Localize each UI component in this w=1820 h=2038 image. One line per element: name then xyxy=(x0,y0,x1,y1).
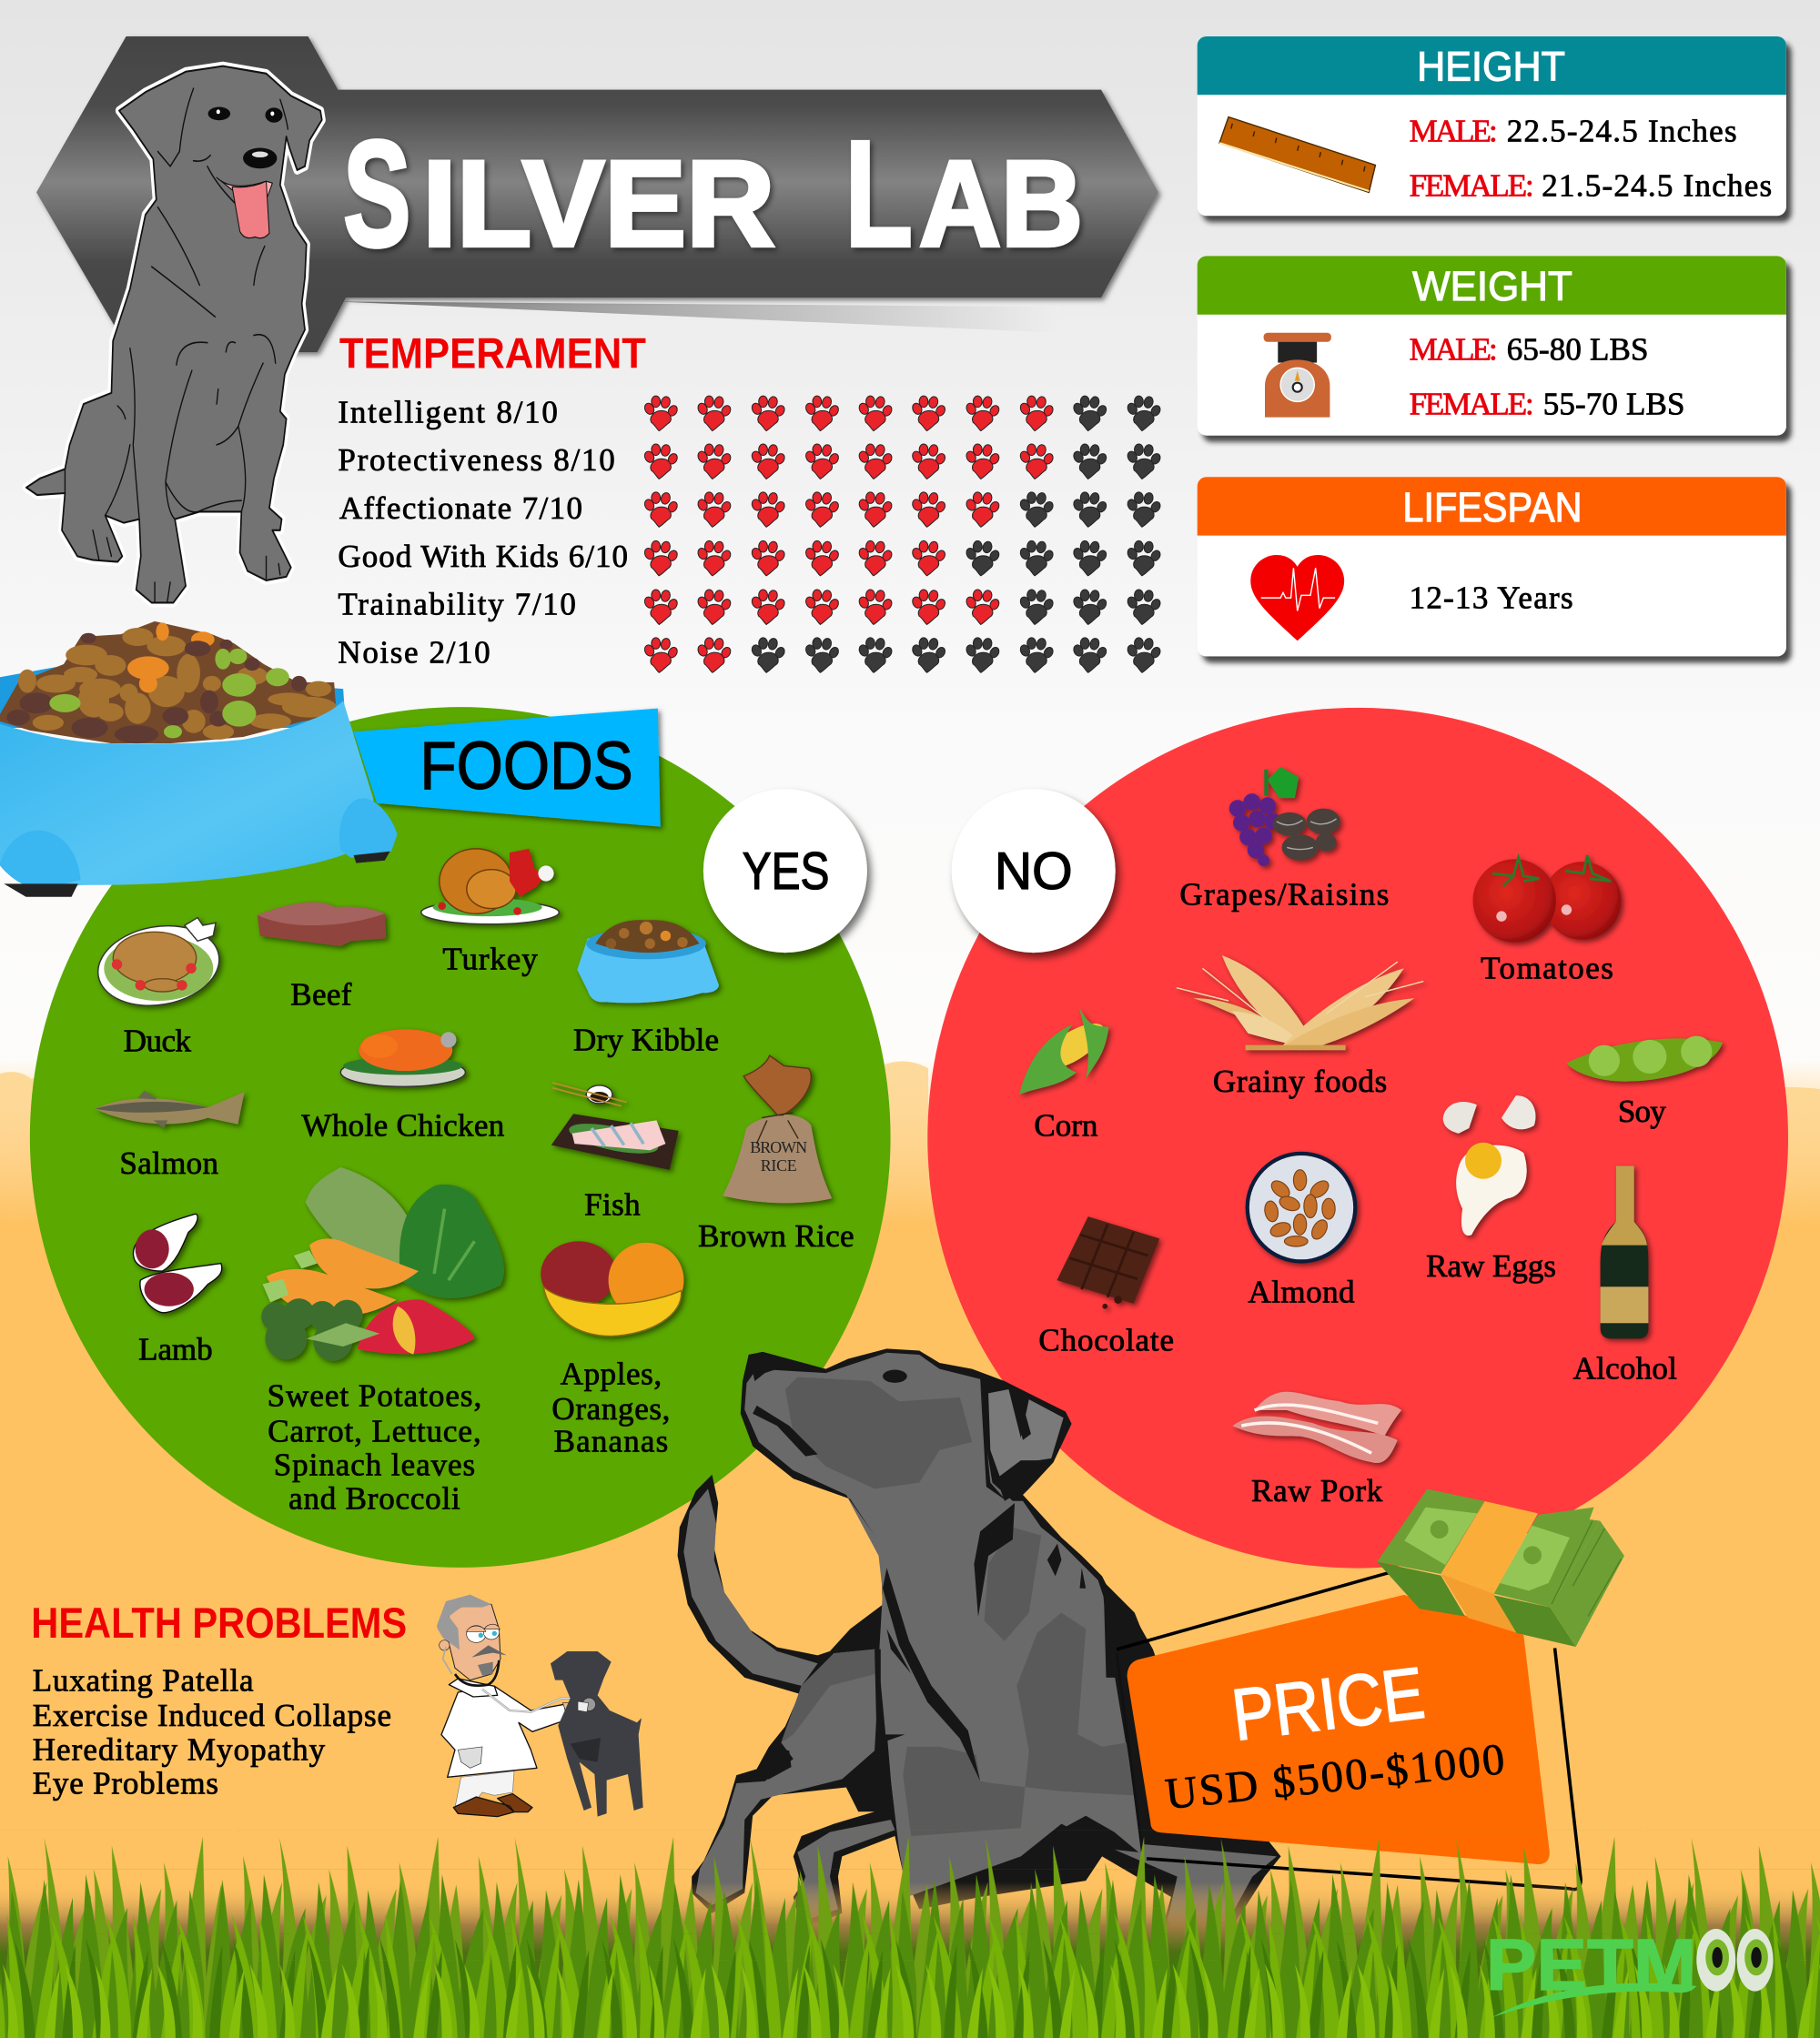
food icon: vegetables xyxy=(261,1167,504,1361)
rating labels: Affectionate 7/10 xyxy=(339,490,582,526)
panel: foods yes circle xyxy=(30,707,891,1568)
yes badge xyxy=(703,789,867,953)
no-food labels: Soy xyxy=(1618,1094,1666,1129)
logo: petmoo: PETM xyxy=(1486,1924,1696,2005)
panel: height: HEIGHT xyxy=(1417,44,1565,90)
panel: lifespan xyxy=(1198,477,1786,656)
food icon: tomatoes xyxy=(1473,855,1621,943)
haunch and front leg xyxy=(696,1650,876,1905)
food icon: raw pork bacon xyxy=(1232,1392,1401,1463)
title text: L xyxy=(845,110,913,278)
title banner xyxy=(36,36,1158,352)
panel: weight xyxy=(1198,256,1786,436)
heading: health problems: HEALTH PROBLEMS xyxy=(31,1599,407,1647)
food icon: salmon xyxy=(95,1091,245,1128)
food icon: dry kibble bowl xyxy=(577,920,719,1003)
no-food labels: Raw Pork xyxy=(1251,1473,1383,1508)
panel: price tag: PRICE xyxy=(1228,1652,1429,1756)
icon: big black lab xyxy=(678,1348,1281,1938)
food labels: Sweet Potatoes, xyxy=(268,1378,481,1414)
panel: weight: WEIGHT xyxy=(1412,263,1572,309)
panel: price tag xyxy=(1117,1571,1581,1890)
food labels: and Broccoli xyxy=(288,1481,460,1517)
grass xyxy=(0,1830,1820,2038)
panel: height: 22.5-24.5 Inches xyxy=(1507,114,1737,149)
food labels: Bananas xyxy=(554,1424,668,1459)
icon: money stack xyxy=(1377,1489,1624,1647)
panel: price tag: USD $500-$1000 xyxy=(1163,1734,1507,1819)
rating labels: Noise 2/10 xyxy=(338,635,490,671)
panel: weight: MALE: xyxy=(1410,332,1498,368)
title text: S xyxy=(343,110,410,278)
food labels: Lamb xyxy=(138,1331,213,1367)
title text xyxy=(343,110,1083,278)
temperament ratings xyxy=(338,394,1162,672)
no-food labels: Raw Eggs xyxy=(1426,1248,1556,1284)
food icon: raw eggs xyxy=(1443,1095,1535,1236)
food icon: fish platter xyxy=(551,1083,679,1170)
rating labels: Good With Kids 6/10 xyxy=(338,539,628,574)
food labels: Whole Chicken xyxy=(301,1108,504,1144)
food icon: corn xyxy=(1019,1007,1111,1095)
no-food labels: Almond xyxy=(1248,1274,1355,1309)
panel: weight: FEMALE: xyxy=(1410,387,1534,422)
food labels: Oranges, xyxy=(551,1391,670,1427)
silhouette xyxy=(678,1348,1281,1938)
panel: weight: 65-80 LBS xyxy=(1507,332,1648,368)
ear xyxy=(988,1389,1064,1478)
icon: vet doctor xyxy=(437,1595,587,1817)
title text: AB xyxy=(919,136,1083,272)
food icon: fruit xyxy=(541,1241,683,1337)
food labels: Brown Rice xyxy=(698,1218,854,1254)
food icon: soy pod xyxy=(1566,1036,1723,1082)
icon: small black dog xyxy=(551,1651,643,1817)
no badge xyxy=(952,789,1116,953)
food labels: Spinach leaves xyxy=(274,1447,475,1482)
food icon: brown rice sack: RICE xyxy=(761,1156,797,1175)
paw rows xyxy=(643,396,1055,672)
horizon trees right xyxy=(1742,1087,1820,1247)
panel: height: MALE: xyxy=(1410,114,1498,149)
food icon: brown rice sack xyxy=(723,1055,832,1203)
foods banner: FOODS xyxy=(420,728,633,803)
food labels: Beef xyxy=(290,976,352,1012)
food icon: grapes and raisins xyxy=(1229,767,1340,866)
food labels: Turkey xyxy=(442,942,538,977)
foods banner xyxy=(354,709,661,827)
no badge: NO xyxy=(995,842,1073,901)
icon group: wheat xyxy=(1177,955,1423,1050)
food icon: chocolate xyxy=(1057,1216,1159,1309)
darker patches xyxy=(785,1377,1135,1836)
panel: foods no circle xyxy=(927,708,1788,1569)
health problem list xyxy=(33,1663,391,1801)
food icon: champagne xyxy=(1601,1165,1648,1338)
no-food labels: Grapes/Raisins xyxy=(1179,876,1389,912)
rating labels: Trainability 7/10 xyxy=(338,587,576,622)
food icon: brown rice sack: BROWN xyxy=(750,1138,807,1156)
food icon: duck xyxy=(92,917,226,1014)
yes badge: YES xyxy=(743,842,829,901)
rating labels: Protectiveness 8/10 xyxy=(338,442,615,478)
title text: ILVER xyxy=(422,136,774,272)
panel: weight: 55-70 LBS xyxy=(1543,387,1684,422)
panel: height xyxy=(1198,36,1786,216)
panel: lifespan: LIFESPAN xyxy=(1402,484,1582,530)
light coat xyxy=(744,1353,1277,1933)
food labels: Carrot, Lettuce, xyxy=(268,1413,481,1448)
health problem list: Hereditary Myopathy xyxy=(33,1731,326,1767)
horizon trees centre xyxy=(858,1062,928,1247)
food icon: beef xyxy=(258,903,386,946)
no-food labels xyxy=(1034,876,1677,1508)
logo: petmoo xyxy=(1486,1924,1774,2017)
food icon: lamb chops xyxy=(133,1214,222,1313)
no-food labels: Chocolate xyxy=(1038,1322,1174,1357)
food labels: Salmon xyxy=(119,1145,218,1181)
health problem list: Luxating Patella xyxy=(33,1663,254,1699)
panel: height: 21.5-24.5 Inches xyxy=(1542,168,1772,204)
rating labels: Intelligent 8/10 xyxy=(338,394,558,429)
tail xyxy=(683,1488,818,1686)
food labels xyxy=(119,942,854,1517)
food icon: whole chicken xyxy=(340,1029,465,1086)
heading: temperament: TEMPERAMENT xyxy=(339,328,646,377)
food labels: Apples, xyxy=(561,1356,662,1391)
icon: scale xyxy=(1264,333,1331,418)
panel: height: FEMALE: xyxy=(1410,168,1534,204)
icon: heart xyxy=(1250,555,1344,641)
food labels: Duck xyxy=(124,1024,192,1059)
rating labels xyxy=(338,394,628,671)
health problem list: Eye Problems xyxy=(33,1765,218,1801)
rear leg xyxy=(797,1820,895,1922)
food labels: Dry Kibble xyxy=(573,1022,719,1057)
food labels: Fish xyxy=(584,1187,641,1223)
food icon: turkey xyxy=(421,849,559,924)
icon: sitting silver lab xyxy=(26,66,322,602)
health problem list: Exercise Induced Collapse xyxy=(33,1698,391,1733)
dark line work xyxy=(741,1352,1151,1852)
no-food labels: Alcohol xyxy=(1573,1351,1677,1387)
icon: ruler xyxy=(1219,117,1375,192)
no-food labels: Grainy foods xyxy=(1213,1064,1387,1099)
food icon: almond bowl xyxy=(1246,1152,1357,1264)
panel: lifespan: 12-13 Years xyxy=(1410,580,1573,616)
icon: food bowl xyxy=(0,621,398,897)
no-food labels: Tomatoes xyxy=(1481,951,1613,986)
no-food labels: Corn xyxy=(1034,1108,1097,1144)
kibble mound xyxy=(0,621,337,743)
horizon trees left xyxy=(0,1072,81,1247)
